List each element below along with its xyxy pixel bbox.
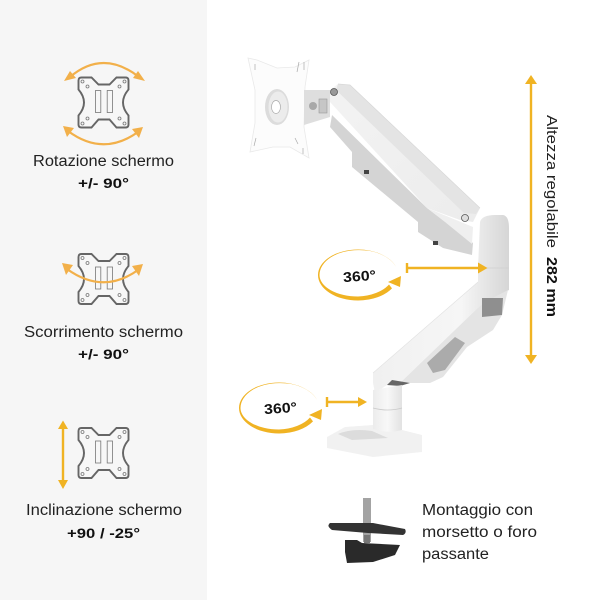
- ring arrowhead: [388, 276, 401, 287]
- mounting text: morsetto o foro: [422, 524, 537, 541]
- swivel hinge: [304, 90, 330, 125]
- central column and lower arm: [373, 215, 509, 393]
- feature: screen swivel: [24, 254, 183, 362]
- lower grey gas spring cover, upper arm: [330, 115, 473, 255]
- ring arrowhead: [309, 409, 322, 420]
- label: 360°: 360°: [263, 399, 298, 417]
- VESA plate: [248, 58, 309, 158]
- height label: [543, 115, 559, 317]
- feature: screen rotation: [33, 63, 174, 191]
- icon: desk clamp: [328, 498, 406, 563]
- value: +/- 90°: +/- 90°: [78, 347, 129, 362]
- rotation indicator: upper joint: [318, 250, 488, 300]
- value: +/- 90°: +/- 90°: [78, 176, 129, 191]
- height arrow: [525, 75, 537, 364]
- feature: screen tilt: [26, 420, 182, 541]
- icon: mounting plate with rotation arrows: [63, 63, 145, 144]
- rotation ring: [239, 382, 317, 434]
- panel: left feature column: [0, 0, 207, 600]
- rotation ring: [318, 250, 396, 300]
- upper arm body: [330, 84, 480, 222]
- mounting text: Montaggio con: [422, 502, 533, 519]
- mounting text: passante: [422, 546, 489, 563]
- label: Inclinazione schermo: Inclinazione schermo: [26, 502, 182, 519]
- icon: mounting plate with tilt arrow: [58, 420, 128, 489]
- base post and clamp plate: [327, 385, 422, 457]
- pointer arrow: [407, 263, 480, 273]
- label: Rotazione schermo: Rotazione schermo: [33, 153, 174, 170]
- label: 360°: 360°: [342, 267, 377, 285]
- label: Scorrimento schermo: Scorrimento schermo: [24, 324, 183, 341]
- value: +90 / -25°: +90 / -25°: [67, 526, 140, 541]
- mounting text: [422, 502, 537, 563]
- icon: mounting plate with swivel arrow: [62, 254, 143, 304]
- height label: Altezza regolabile: [543, 115, 559, 248]
- pointer arrow: [327, 397, 360, 407]
- height label: 282 mm: [543, 257, 559, 317]
- rotation indicator: lower joint: [239, 382, 367, 434]
- monitor arm illustration: [248, 58, 509, 457]
